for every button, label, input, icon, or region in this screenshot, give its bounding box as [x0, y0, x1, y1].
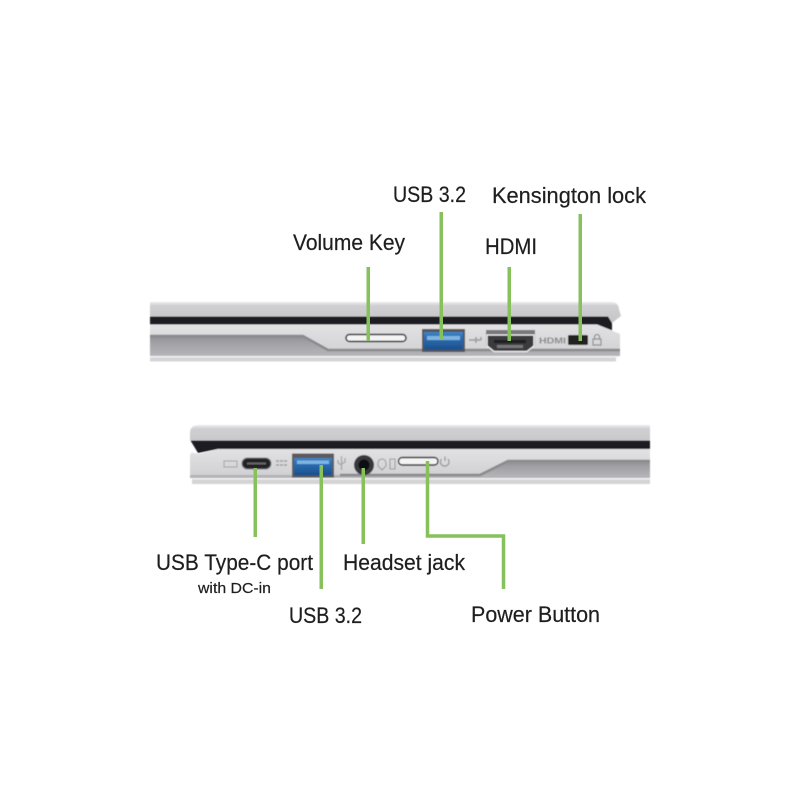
USB 3.2 port	[292, 454, 334, 478]
power icon	[440, 456, 449, 466]
callout line: bottom USB 3.2	[320, 465, 323, 589]
callout line: USB Type-C	[254, 468, 257, 537]
callout line: HDMI	[508, 267, 511, 341]
label: USB Type-C port: USB Type-C port	[156, 550, 313, 575]
USB 3.2 port	[422, 329, 465, 352]
label: Volume Key: Volume Key	[293, 230, 405, 255]
callout line: Kensington lock	[578, 214, 582, 341]
hinge gap	[190, 440, 650, 453]
label: with DC-in: with DC-in	[197, 580, 271, 597]
headset jack	[354, 455, 374, 475]
callout line: Volume Key	[366, 267, 370, 341]
callout line: top USB 3.2	[440, 212, 443, 340]
lid	[190, 425, 650, 447]
HDMI marking: HDMI	[539, 336, 566, 346]
sculpted groove	[150, 336, 620, 356]
hinge gap	[150, 316, 612, 330]
HDMI port	[486, 330, 535, 352]
volume key	[346, 334, 406, 342]
label: USB 3.2 bottom: USB 3.2	[289, 603, 362, 628]
data marking	[276, 461, 287, 465]
laptop: left side view	[190, 425, 650, 484]
label: Power Button: Power Button	[471, 602, 600, 627]
label: Headset jack: Headset jack	[343, 550, 466, 575]
label: HDMI: HDMI	[485, 234, 537, 259]
lock icon	[593, 334, 601, 345]
lid	[150, 302, 621, 323]
sculpted groove	[190, 461, 650, 478]
label: Kensington lock: Kensington lock	[492, 183, 647, 208]
Kensington slot	[568, 335, 588, 345]
callout line: Headset jack	[362, 468, 365, 544]
label: USB 3.2 top: USB 3.2	[393, 182, 466, 207]
laptop: right side view	[150, 302, 621, 362]
base body	[150, 324, 620, 358]
USB Type-C port	[242, 458, 271, 469]
callout line: Power Button	[428, 461, 504, 589]
bottom lip	[192, 478, 650, 480]
USB symbol	[469, 337, 481, 343]
headset and camera markings	[378, 459, 395, 470]
bottom lip	[150, 356, 618, 358]
base body	[190, 449, 650, 478]
power button	[398, 458, 438, 465]
USB symbol	[338, 456, 345, 470]
charging marking	[224, 461, 237, 467]
